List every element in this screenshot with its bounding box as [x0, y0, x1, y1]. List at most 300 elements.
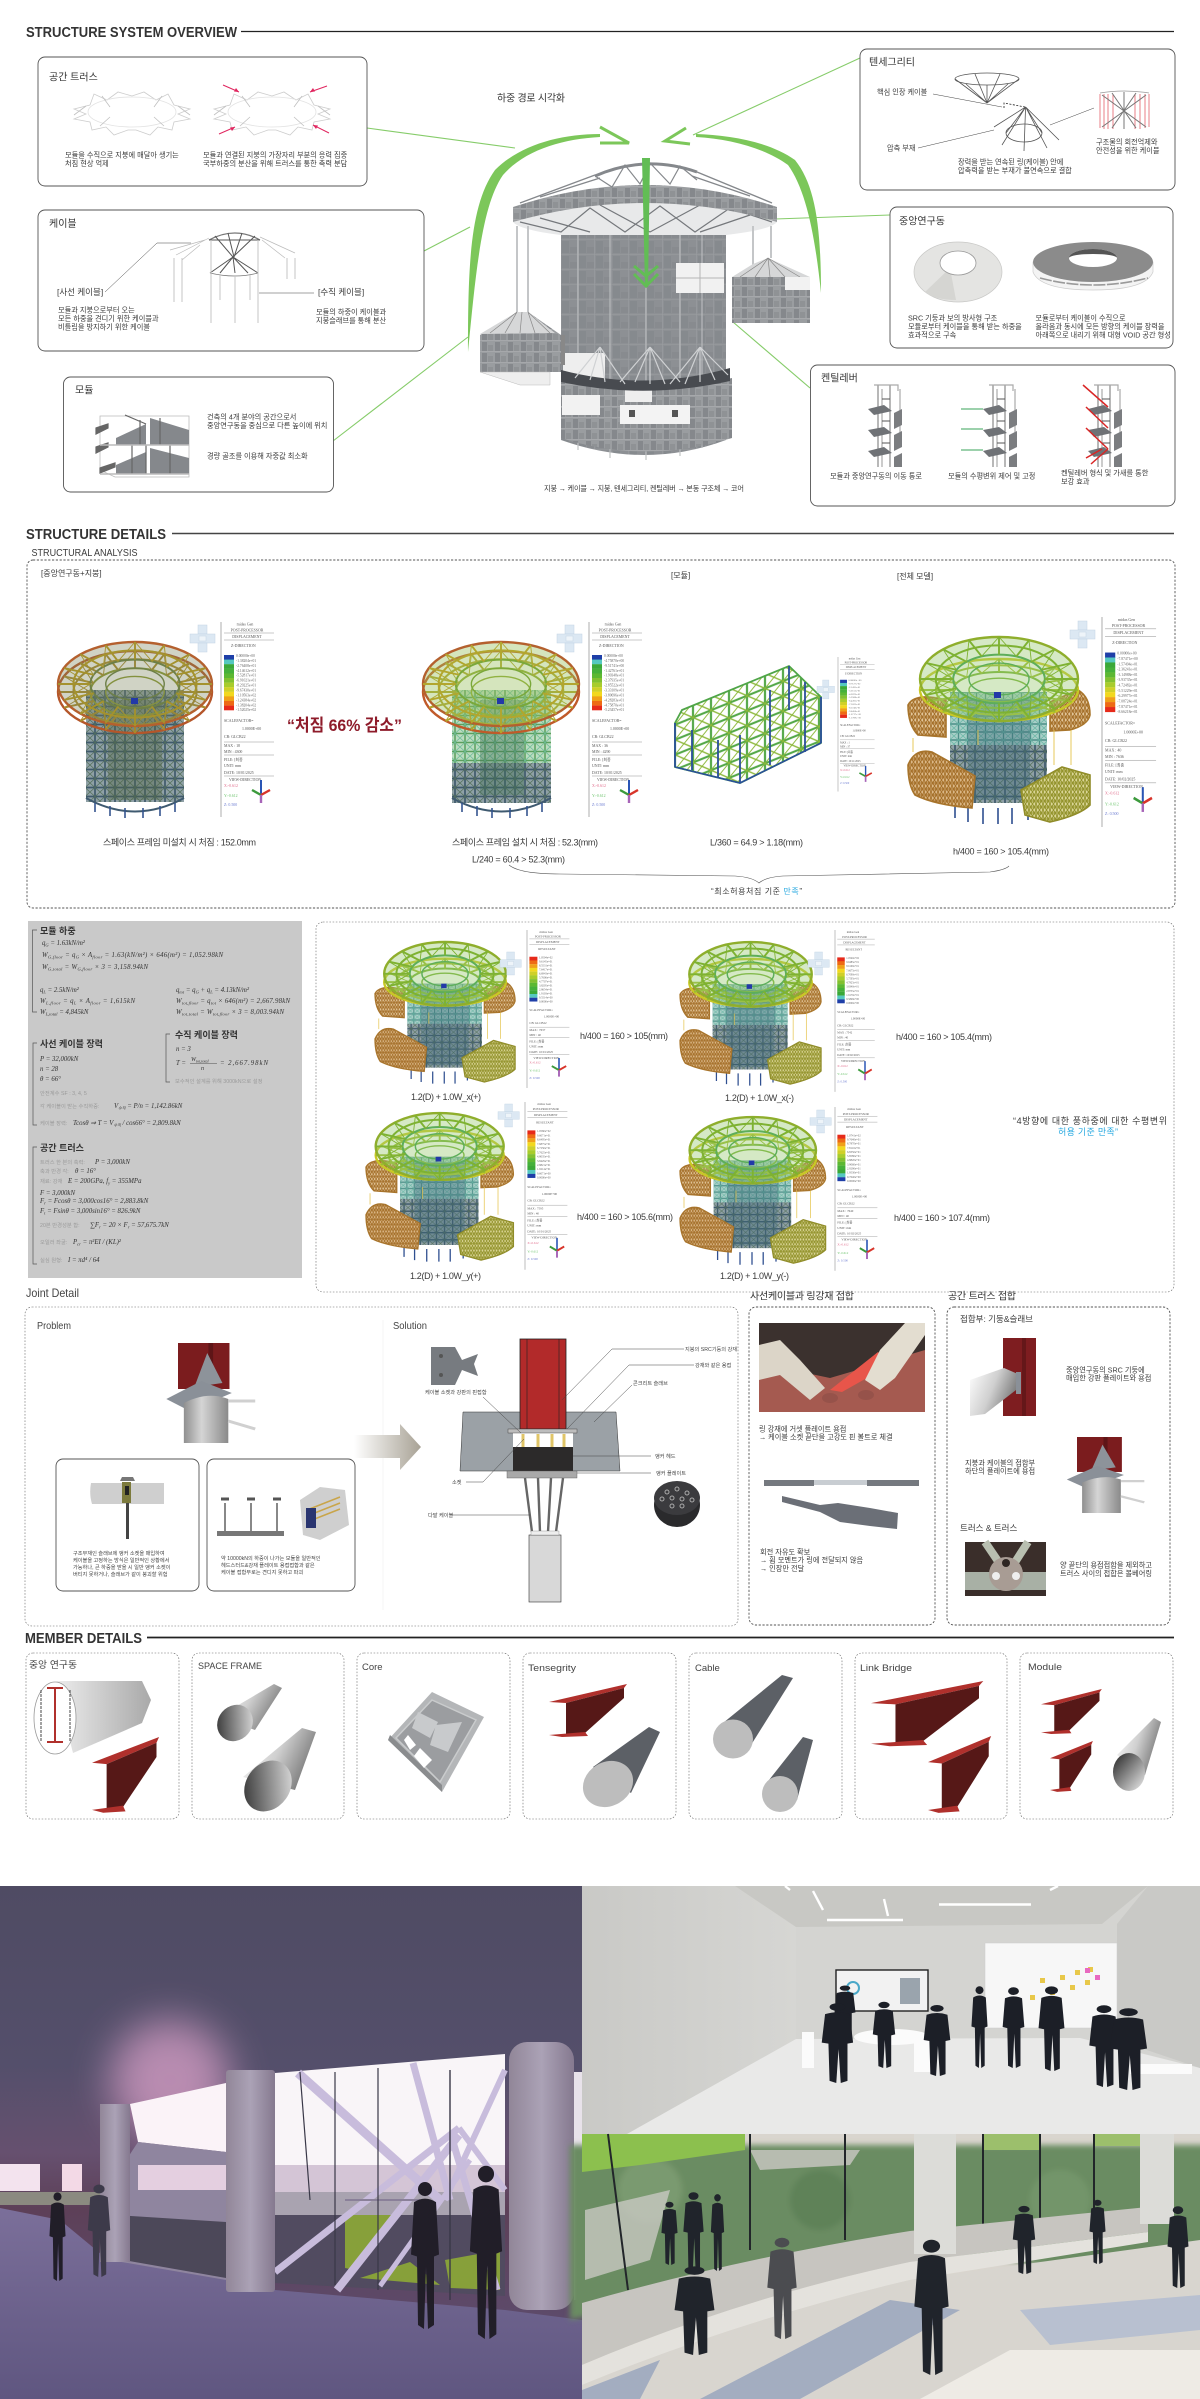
diagonal cable tension: 각 케이블이 받는 수직하중:	[40, 1102, 100, 1110]
legend x+: 2.8654e+01	[539, 987, 553, 991]
FEM legend 3: -6.4305e-01	[848, 700, 861, 703]
FEM legend 4: MIN : 7636	[1105, 754, 1124, 759]
FEM legend 3: -8.5740e-01	[848, 706, 861, 709]
text block	[207, 412, 327, 460]
FEM legend 1: -2.76408e+01	[236, 664, 256, 668]
sub-heading: structural analysis: STRUCTURAL ANALYSIS	[32, 547, 138, 559]
space truss calc: = Fsinθ = 3,000sin16° = 826.9kN	[45, 1208, 141, 1215]
space truss calc: 축과 반경 각:	[40, 1167, 69, 1175]
space truss calc: 공간 트러스	[40, 1143, 84, 1153]
module load: L,floor	[45, 1000, 61, 1006]
concrete slab	[914, 242, 1002, 302]
FEM legend 1: -6.91021e+01	[236, 679, 256, 683]
FEM legend 4: -7.87471e+00	[1117, 657, 1138, 661]
group labels: [중앙연구동+지붕]	[41, 568, 102, 578]
suspended cables	[517, 226, 771, 312]
panel: calculation sheet	[28, 921, 302, 1278]
vertical cable tension: = 2,667.98kN	[220, 1060, 268, 1067]
results: 1.2(D) + 1.0W_x(+)	[411, 1092, 481, 1102]
text: 중앙연구동의 SRC 기둥에	[1066, 1366, 1145, 1374]
truss ring with stress arrows	[214, 85, 330, 135]
left window	[100, 2083, 226, 2280]
module load: G,floor	[77, 966, 93, 972]
FEM legend 2: -4.75870e+00	[604, 659, 624, 663]
legend y-: DATE: 10/02/2025	[837, 1232, 862, 1236]
people	[822, 1985, 1147, 2090]
space truss calc: 실심 원형:	[40, 1256, 62, 1264]
space truss calc	[39, 1143, 169, 1264]
floor	[0, 2208, 582, 2399]
legend x-: 9.6485e+01	[846, 960, 860, 964]
FEM model: full	[908, 637, 1090, 824]
left wall	[582, 1886, 796, 2134]
space truss calc: r	[128, 1224, 130, 1230]
module load: G,total	[48, 966, 63, 972]
legend y-: 1.0741e+02	[847, 1133, 861, 1137]
FEM legend 3: -9.6458e-01	[848, 710, 861, 713]
legend x-: 1.0540e+02	[846, 956, 860, 960]
FEM legend 2: MAX : 36	[592, 744, 608, 748]
view cube	[557, 625, 582, 652]
truss node photo	[965, 1542, 1046, 1596]
floor reflections	[582, 2240, 1200, 2399]
legend x+: MIN : 40	[529, 1033, 541, 1037]
member: tensegrity: Tensegrity	[528, 1663, 576, 1674]
panel: space truss joint	[947, 1290, 1170, 1625]
member: module	[1020, 1653, 1173, 1819]
problem joint image	[166, 1343, 255, 1443]
FEM legend 3: MAX : 1	[840, 741, 850, 744]
panel: diagonal cable and ring joint	[749, 1290, 935, 1625]
labels: 장력을 받는 연속된 링(케이블) 안에	[958, 158, 1063, 166]
labels: 압축 부재	[887, 144, 915, 152]
text block	[203, 150, 348, 168]
heading: joint detail: Joint Detail	[26, 1286, 79, 1300]
FEM legend 3: -1.1789e+00	[848, 717, 862, 720]
text: 양 끝단의 용접접합을 제외하고	[1060, 1560, 1152, 1570]
text: 매입한 강판 플레이트와 용접	[1066, 1374, 1151, 1382]
problem box 2	[207, 1459, 355, 1591]
labels: 핵심 인장 케이블	[877, 88, 928, 96]
solution labels: 소켓	[452, 1478, 462, 1486]
heading: 공간 트러스 접합	[948, 1290, 1016, 1302]
member: central research building	[26, 1653, 179, 1819]
labels: 압축력을 받는 부재가 불연속으로 결합	[958, 166, 1072, 175]
legend y-: 3.9060e+01	[847, 1162, 861, 1166]
lawn and paths	[582, 2134, 1140, 2280]
results: 1.2(D) + 1.0W_x(-)	[725, 1093, 794, 1103]
view cubes	[498, 952, 831, 1133]
panel: cable	[38, 210, 424, 351]
legend y-: 9.7640e+00	[847, 1175, 861, 1179]
text block: → 케이블 소켓 끝단을 고강도 핀 볼트로 체결	[759, 1432, 893, 1442]
cable diagram	[170, 233, 295, 323]
legend x-: MIN : 40	[837, 1036, 849, 1040]
diagonal cable tension: 사선 케이블 장력	[40, 1038, 103, 1049]
module load: × 3 = 3,158.94kN	[93, 964, 148, 971]
problem box 1: 케이블을 고정하는 방식은 일반적인 상황에서	[73, 1556, 170, 1564]
legend y-: RESULTANT	[846, 1125, 864, 1129]
FEM legend 1: MAX : 18	[224, 744, 240, 748]
legend x-: 4.7925e+01	[846, 980, 860, 985]
legend y-: 1.9530e+01	[847, 1171, 861, 1175]
results: h/400 = 160 > 105.6(mm)	[577, 1212, 673, 1222]
member: space frame: SPACE FRAME	[198, 1661, 262, 1672]
section heading: structure system overview: STRUCTURE SYSTEM OVERVIEW	[26, 25, 237, 41]
text block: 국부하중의 분산을 위해 트러스를 통한 축력 분담	[203, 159, 348, 168]
cantilever section 3 with red bracing	[1083, 385, 1122, 467]
FEM legend 3: DATE: 10/11/2025	[840, 760, 861, 763]
FEM legend 4: -5.51229e+01	[1117, 689, 1138, 693]
FEM legend 3: -2.1435e-01	[848, 686, 861, 689]
panel: central research building	[890, 207, 1173, 348]
module load: tot	[179, 990, 185, 994]
member: link bridge: Link Bridge	[860, 1663, 912, 1674]
FEM legend 4: -7.08724e+01	[1117, 699, 1138, 704]
FEM legend 1: -5.52817e+01	[236, 674, 256, 678]
legend x-	[835, 930, 875, 1092]
space truss calc: ∑F	[90, 1222, 99, 1229]
space truss calc: θ = 16°	[75, 1168, 96, 1175]
panel: joint detail	[25, 1307, 738, 1626]
results: 1.2(D) + 1.0W_y(+)	[410, 1271, 481, 1281]
FEM legend 1: -1.10563e+02	[236, 693, 256, 697]
view cube	[190, 625, 215, 652]
legend x+: 0.0000e+00	[539, 999, 553, 1003]
text block: 건축의 4개 분야의 공간으로서	[207, 412, 296, 422]
FEM legend 2: -2.85522e+01	[604, 684, 624, 688]
heading: 중앙연구동	[899, 216, 945, 228]
text block: 중앙연구동을 중심으로 다른 높이에 위치	[207, 421, 327, 430]
column joint image	[970, 1338, 1036, 1416]
legend x-: MAX : 7542	[837, 1031, 853, 1035]
module load: = 1.63(kN/m²) × 646(m²) = 1,052.98kN	[103, 952, 223, 959]
member: link bridge	[855, 1653, 1007, 1819]
FEM legend 2: 0.00000e+00	[604, 654, 623, 658]
space truss calc: P = 3,000kN	[94, 1159, 130, 1166]
group labels: [모듈]	[671, 571, 690, 580]
cantilever section 1	[868, 385, 902, 467]
callout: deflection reduced: “처짐 66% 감소”	[287, 716, 402, 735]
legend y-: MIN : 40	[837, 1214, 849, 1218]
results: h/400 = 160 > 105.4(mm)	[896, 1032, 992, 1042]
module load: floor	[90, 1000, 101, 1006]
legend x+: 1.9103e+01	[539, 991, 553, 995]
text	[1060, 1560, 1152, 1578]
heading: 켄틸레버	[821, 372, 858, 384]
legend x+: 3.8205e+01	[539, 983, 553, 987]
legend y-: MAX : 7640	[837, 1209, 854, 1213]
arrow: left load path	[468, 127, 629, 352]
display screen	[836, 1970, 928, 2011]
legend y-: 0.0000e+00	[847, 1179, 861, 1183]
group labels	[41, 568, 933, 581]
people silhouettes	[49, 2166, 502, 2339]
text blocks: 모듈로부터 케이블이 수직으로	[1036, 314, 1126, 322]
roof top compression ring	[520, 163, 772, 203]
FEM legend 1: -8.29225e+01	[236, 684, 256, 688]
vertical cable text: 지붕슬래브를 통해 분산	[316, 316, 387, 325]
space truss calc: = 57,675.7kN	[129, 1222, 169, 1229]
legend y+: 3.8429e+01	[537, 1159, 551, 1163]
vertical cable tension: tot,total	[196, 1058, 209, 1064]
FEM legend 4: -8.66218e+01	[1117, 710, 1138, 714]
FEM legend 1: MIN : 4300	[224, 750, 242, 754]
diagonal cable tension: 수직	[118, 1106, 126, 1110]
FEM legend 1: -1.52025e+02	[236, 708, 256, 712]
FEM legend 1: -1.38204e+01	[236, 659, 256, 663]
section heading: member details: MEMBER DETAILS	[25, 1631, 142, 1647]
vertical cable tension: n = 3	[176, 1046, 191, 1053]
render: meeting room	[582, 1886, 1200, 2134]
legend y+: MAX : 7595	[527, 1206, 544, 1211]
module load: + q	[199, 987, 211, 994]
module load: tot,total	[182, 1012, 199, 1018]
panel: cantilever	[810, 365, 1175, 506]
captions	[103, 836, 1049, 864]
vertical cable tension	[175, 1029, 268, 1085]
text block	[760, 1548, 864, 1573]
conclusion	[1013, 1115, 1167, 1137]
core cylinder	[561, 232, 726, 460]
legend y-: 8.7870e+01	[847, 1142, 861, 1146]
space truss calc: 재료: 강재	[40, 1177, 63, 1185]
legend x-: 3.8340e+01	[846, 985, 860, 989]
module load: W	[42, 952, 48, 959]
panel: module	[64, 377, 334, 492]
render: lounge with bench	[570, 2134, 1200, 2399]
FEM legend 4: -6.29977e+01	[1117, 694, 1138, 698]
problem box 2: 케이블 접합부로는 견디지 못하고 파괴	[221, 1568, 303, 1576]
legend x+: 9.5514e+00	[539, 995, 553, 999]
FEM legend 3: -9.7127e-02	[848, 683, 861, 686]
FEM legend 3	[838, 657, 875, 792]
brackets	[32, 930, 170, 1264]
ceiling	[735, 1886, 1148, 1927]
ceiling lights	[785, 1886, 1058, 1920]
problem box 1	[56, 1459, 199, 1591]
FEM legend 1	[221, 622, 274, 817]
FEM legend 3: Z-DIRECTION	[845, 672, 862, 675]
module load: L	[73, 1000, 77, 1006]
arrow: centre load path	[634, 158, 658, 287]
text: 지붕과 케이블의 접합부	[965, 1458, 1036, 1468]
legend y+: MIN : 40	[527, 1212, 539, 1216]
labels: 안전성을 위한 케이블	[1096, 146, 1160, 155]
module load: = W	[63, 964, 78, 971]
FEM legend 4: DATE: 10/02/2025	[1105, 777, 1135, 782]
text block: 경량 골조를 이용해 자중값 최소화	[207, 452, 308, 460]
FEM legend 2: -5.23457e+01	[604, 708, 624, 712]
legend y-: 5.8580e+01	[847, 1154, 861, 1158]
captions: 모듈과 중앙연구동의 이동 통로	[830, 472, 922, 480]
module load: × A	[77, 998, 91, 1005]
legend y+: 6.7250e+01	[537, 1146, 551, 1150]
FEM legend 2: -9.51741e+00	[604, 664, 624, 668]
space truss calc: = 20 × F	[101, 1222, 129, 1229]
trees	[570, 2145, 1200, 2320]
legend x-: 2.8755e+01	[846, 989, 860, 993]
labels: 구조물의 회전억제와	[1096, 138, 1158, 146]
space truss calc: I = πd⁴ / 64	[67, 1257, 100, 1264]
legend x+: 5.7606e+01	[539, 975, 553, 979]
cable socket elevation	[764, 1480, 919, 1486]
solution labels: 다발 케이블	[428, 1511, 454, 1519]
captions: 스페이스 프레임 설치 시 처짐 : 52.3(mm)	[452, 836, 598, 848]
central window	[275, 2054, 505, 2296]
tensegrity diagram	[955, 73, 1059, 151]
solution labels: 강재와 같은 용접	[695, 1361, 732, 1369]
FEM legend 1: DATE: 10/01/2025	[224, 771, 254, 775]
FEM legend 4: -2.36241e+01	[1117, 668, 1138, 672]
text: 하단의 플레이트에 용접	[965, 1466, 1035, 1476]
right module	[732, 258, 810, 323]
cap joint image	[1067, 1437, 1144, 1513]
legend x-: 7.6675e+01	[846, 968, 860, 972]
caption: load flow: 지붕 → 케이블 → 지붕, 텐세그리티, 켄틸레버 → 본동 구조체 → 코어	[544, 484, 744, 493]
vertical cable tension: 수직 케이블 장력	[175, 1029, 238, 1040]
module load: 모듈 하중	[40, 925, 76, 936]
mullions	[608, 2134, 1094, 2290]
space truss calc: t	[44, 1210, 46, 1216]
legend y+: 8.6495e+01	[537, 1137, 551, 1142]
FEM legend 3: -4.2870e-01	[848, 693, 861, 696]
legend x+: 7.6417e+01	[539, 967, 553, 971]
problem box 2: 약 10000kN의 하중이 나가는 모듈을 일반적인	[221, 1554, 321, 1562]
legend y+: 0.0000e+00	[537, 1176, 551, 1180]
text block: → 휨 모멘트가 링에 전달되지 않음	[760, 1556, 864, 1564]
legend x-: 9.5848e+00	[846, 997, 860, 1001]
group labels: [전체 모델]	[897, 571, 933, 581]
FEM legend 1: -9.67430e+01	[236, 689, 256, 693]
section heading: structure details: STRUCTURE DETAILS	[26, 527, 166, 543]
roof truss underside	[513, 203, 777, 235]
roof ring band	[513, 185, 777, 222]
solution section drawing	[460, 1339, 620, 1602]
FEM legend 2: MIN : 4290	[592, 750, 610, 754]
space truss calc: r	[44, 1200, 46, 1206]
ring slab with void	[1033, 242, 1153, 290]
diagonal cable tension: 케이블 장력:	[40, 1119, 67, 1127]
results	[410, 1031, 992, 1281]
module load: W	[40, 998, 46, 1005]
text blocks: 아래쪽으로 내리기 위해 대형 VOID 공간 형성	[1036, 330, 1171, 340]
legend y-: 7.8110e+01	[847, 1146, 861, 1150]
text	[965, 1458, 1036, 1476]
FEM legend 4: 0.00000e+00	[1117, 652, 1137, 656]
FEM legend 1: -4.14612e+01	[236, 669, 256, 673]
render: purple atrium interior	[0, 1886, 582, 2399]
module section drawing	[96, 415, 189, 477]
module load: W	[40, 1009, 46, 1016]
FEM: wind y-	[680, 1117, 826, 1265]
heading: 모듈	[75, 384, 93, 396]
legend x-: RESULTANT	[846, 948, 862, 952]
legend x-: 5.7505e+01	[846, 976, 860, 981]
module load: G	[45, 942, 49, 948]
member: tensegrity	[523, 1653, 676, 1819]
legend x-: 1.9170e+01	[846, 993, 860, 997]
legend x+: 6.6943e+01	[539, 971, 553, 975]
legend y+: 9.6071e+00	[537, 1171, 551, 1176]
diagonal cable tension: P = 32,000kN	[39, 1056, 79, 1063]
module load: floor	[92, 954, 103, 960]
legend x+: 8.5531e+01	[539, 963, 553, 967]
FEM legend 2: -4.28283e+01	[604, 698, 624, 702]
diagonal cable tension: θ = 66°	[40, 1076, 61, 1083]
solution leader lines	[452, 1349, 694, 1515]
FEM legend 1: -1.38204e+02	[236, 703, 256, 707]
FEM legend 3: 0.00000e+00	[848, 679, 862, 682]
FEM legend 2: Z-DIRECTION	[599, 644, 624, 648]
diagonal cable tension	[39, 1038, 183, 1128]
legend y+: 9.6071e+01	[537, 1133, 551, 1137]
bench	[582, 2207, 1148, 2385]
FEM model: with space frame	[423, 642, 579, 818]
space truss calc: F	[40, 1208, 44, 1215]
leader lines	[105, 243, 314, 293]
vertical cable tension: T =	[176, 1060, 186, 1067]
FEM: wind x+	[375, 942, 515, 1084]
FEM legend 3: -3.2153e-01	[848, 689, 861, 692]
legend y+: RESULTANT	[536, 1120, 554, 1125]
panel: space truss	[38, 57, 367, 186]
FEM legend 3: -5.3588e-01	[848, 696, 861, 699]
diagonal cable tension: 안전계수 SF : 3, 4, 5	[40, 1089, 87, 1097]
socket render	[431, 1347, 478, 1385]
FEM legend 2: -1.90348e+01	[604, 674, 624, 678]
view cube	[817, 680, 834, 699]
space truss calc: = 355MPa	[110, 1178, 142, 1185]
module load: q	[42, 940, 45, 947]
FEM legend 4: -4.72482e+01	[1117, 683, 1138, 688]
brace	[509, 865, 1009, 883]
diagonal cable tension: V	[114, 1103, 118, 1110]
FEM legend 1: 0.00000e+00	[236, 654, 255, 658]
pink glow	[110, 2020, 230, 2140]
space truss calc: 오일러 좌굴:	[40, 1238, 67, 1246]
legend y+: 1.0560e+02	[537, 1129, 551, 1133]
member: cable: Cable	[695, 1663, 720, 1674]
text blocks: 올라옴과 동시에 모든 방향의 케이블 장력을	[1036, 322, 1165, 331]
vertical cable tension: 보수적인 설계를 위해 3000kN으로 설정	[175, 1077, 263, 1085]
FEM legend 2: DATE: 10/01/2025	[592, 771, 622, 775]
heading: 텐세그리티	[869, 56, 915, 68]
module load: tot,floor	[213, 1012, 230, 1018]
diagonal cable text: 모든 하중을 견디기 위한 케이블과	[58, 314, 159, 323]
FEM legend 2: -1.42761e+01	[604, 669, 624, 673]
truss ring diagram	[74, 92, 190, 135]
module load	[40, 925, 290, 1018]
module load: G	[76, 954, 80, 960]
legend y-	[835, 1107, 877, 1271]
columns	[100, 2042, 574, 2310]
module load: = q	[63, 952, 76, 959]
text blocks: 효과적으로 구속	[908, 330, 957, 340]
module load: tot,floor	[182, 1000, 199, 1006]
conclusion: 허용 기준 만족”	[1058, 1127, 1118, 1137]
legend x+: 4.7707e+01	[539, 979, 553, 983]
module load: G,floor	[48, 954, 63, 960]
diagonal cable text: 모듈과 지붕으로부터 오는	[58, 306, 135, 314]
cable socket render	[782, 1496, 898, 1529]
space truss calc: = Fcosθ = 3,000cos16° = 2,883.8kN	[46, 1198, 149, 1205]
module load: = q	[199, 998, 211, 1005]
legend y+	[525, 1102, 567, 1270]
legend y+: 4.8035e+01	[537, 1154, 551, 1159]
red stability cable diagram	[1100, 91, 1149, 129]
solution labels: 앵커 플레이트	[656, 1469, 686, 1477]
